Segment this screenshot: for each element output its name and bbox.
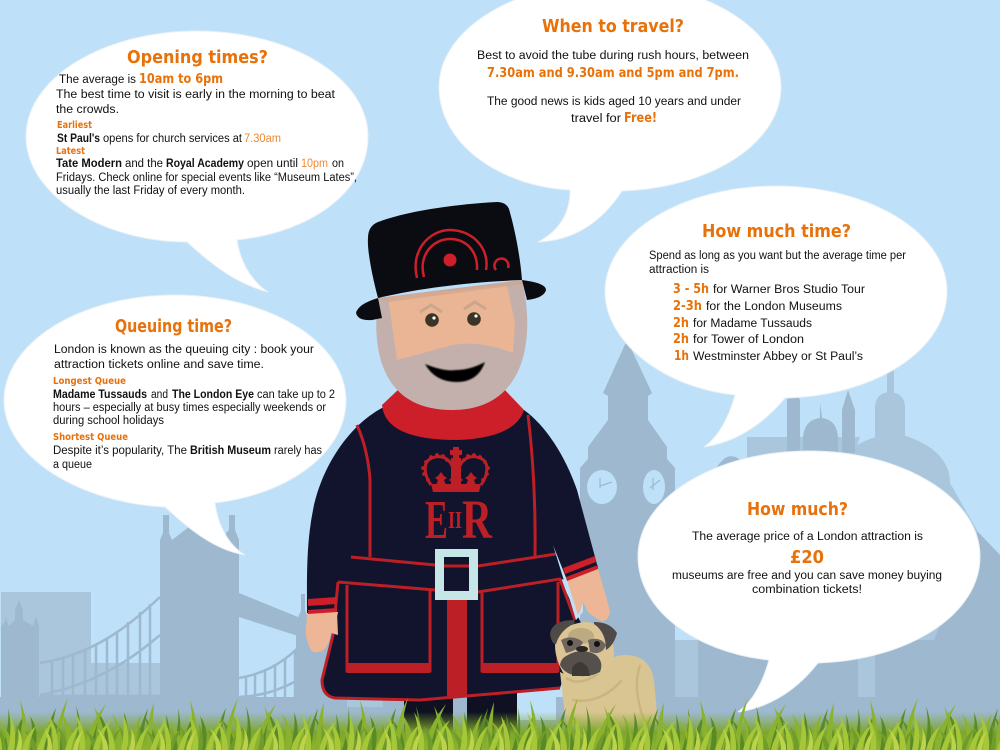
text block: 10am to 6pm: [139, 72, 223, 87]
text block: for Tower of London: [693, 334, 804, 346]
text block: [649, 250, 906, 364]
monogram EIIR: R: [462, 489, 493, 550]
dog ears: [550, 620, 617, 650]
heading: When to travel?: [542, 16, 684, 37]
text block: Tate Modern: [56, 158, 122, 170]
face: [388, 285, 515, 360]
text block: museums are free and you can save money buying: [672, 570, 942, 582]
speech bubble: how much: [638, 451, 980, 712]
text block: opens for church services at: [103, 133, 243, 145]
far buildings: [1, 370, 1000, 702]
text block: 7.30am: [244, 133, 281, 145]
text block: Madame Tussauds: [53, 389, 147, 401]
text block: can take up to 2: [257, 389, 335, 401]
monogram EIIR: E: [425, 489, 448, 550]
text block: Earliest: [57, 120, 92, 131]
text block: and: [151, 389, 168, 401]
text block: attraction is: [649, 264, 709, 276]
crown band: [431, 484, 481, 492]
speech bubble: how much time: [605, 186, 947, 447]
hat: [356, 202, 546, 320]
text block: for the London Museums: [706, 301, 842, 313]
text block: Shortest Queue: [53, 432, 128, 443]
text block: during school holidays: [53, 415, 164, 427]
crown beads: [421, 466, 425, 470]
dog forehead: [568, 628, 594, 644]
speech bubble: opening times: [26, 31, 368, 292]
hat brim: [356, 280, 546, 320]
skyline: London silhouette: [0, 340, 1000, 750]
text block: and the: [125, 158, 163, 170]
dog body: [560, 655, 658, 735]
speech bubble: when to travel: [439, 0, 781, 242]
text block: 2-3h: [673, 299, 702, 314]
bubble shape: [605, 186, 947, 447]
text block: hours – especially at busy times especially weekends or: [53, 402, 326, 414]
right sleeve stripes: [563, 556, 598, 581]
dog eye patches: [561, 637, 606, 653]
bubble shape: [26, 31, 368, 292]
dog muzzle: [560, 651, 601, 676]
text block: Fridays. Check online for special events like “Museum Lates”,: [56, 172, 357, 184]
text block: Spend as long as you want but the average time per: [649, 250, 906, 262]
bubble shape: [439, 0, 781, 242]
speech bubble: queuing time: [4, 295, 346, 555]
heading: Opening times?: [127, 47, 268, 68]
buckle: [435, 549, 478, 600]
text block: 10pm: [301, 158, 328, 170]
text block: Royal Academy: [166, 158, 245, 170]
crown fleurons: [435, 472, 477, 486]
text block: Latest: [56, 146, 85, 157]
pug dog: [550, 620, 658, 735]
ground strip: [0, 697, 1000, 750]
heading: How much?: [747, 499, 848, 520]
text block: Despite it’s popularity, The: [53, 445, 187, 457]
text block: for Warner Bros Studio Tour: [713, 284, 865, 296]
text block: [672, 531, 942, 596]
text block: The average is: [59, 74, 136, 86]
text block: for Madame Tussauds: [693, 318, 812, 330]
coat trim: [322, 415, 575, 700]
right hand: [567, 569, 610, 621]
text block: the crowds.: [56, 104, 119, 116]
text block: British Museum: [190, 445, 271, 457]
text block: [477, 50, 749, 126]
hat crown: [368, 202, 522, 298]
text block: 2h: [673, 316, 689, 331]
text block: The average price of a London attraction is: [692, 531, 923, 543]
left hand: [306, 612, 338, 652]
text block: Free!: [624, 111, 657, 126]
clock faces: [587, 470, 665, 504]
text block: Westminster Abbey or St Paul’s: [693, 351, 863, 363]
text block: [56, 72, 357, 197]
text block: rarely has: [274, 445, 322, 457]
text block: 3 - 5h: [673, 282, 709, 297]
pocket bands: [347, 663, 558, 673]
text block: The best time to visit is early in the morning to beat: [56, 89, 336, 101]
text block: usually the last Friday of every month.: [56, 185, 245, 197]
bubble shape: [638, 451, 980, 712]
dog body shading: [566, 662, 645, 722]
dog nose: [576, 646, 588, 652]
text block: a queue: [53, 459, 92, 471]
tower bridge: [1, 515, 336, 700]
light patches near the ground: [517, 692, 556, 720]
mouth: [425, 362, 485, 382]
sleeve gap: [553, 545, 583, 620]
dog eyes: [567, 640, 600, 647]
text block: Longest Queue: [53, 376, 126, 387]
head: [376, 280, 527, 410]
big ben: [580, 340, 675, 700]
text block: The London Eye: [172, 389, 254, 401]
front panel: [447, 600, 467, 697]
monogram EIIR: [425, 489, 493, 550]
grass: [0, 690, 1000, 750]
crown cross and pillar: [450, 447, 462, 485]
hat shadow on face: [378, 280, 524, 302]
coat: [307, 408, 598, 700]
crown emblem: [421, 447, 490, 492]
text block: London is known as the queuing city : book your: [54, 344, 314, 356]
text block: The good news is kids aged 10 years and under: [487, 96, 741, 108]
text block: attraction tickets online and save time.: [54, 359, 264, 371]
text block: 1h: [674, 349, 689, 364]
monogram EIIR: II: [448, 508, 462, 534]
text block: 7.30am and 9.30am and 5pm and 7pm.: [487, 66, 739, 81]
character: beefeater guard: [306, 202, 610, 750]
left sleeve stripes: [308, 597, 337, 614]
text block: £20: [790, 547, 824, 568]
legs: [404, 690, 517, 750]
text block: travel for: [571, 113, 621, 125]
heading: How much time?: [702, 221, 851, 242]
st pauls towers: [698, 388, 1000, 700]
bubble shape: [4, 295, 346, 555]
text block: combination tickets!: [752, 584, 862, 596]
crown arches: [425, 457, 487, 485]
text block: open until: [247, 158, 298, 170]
text block: [53, 344, 335, 471]
eyebrows: [420, 302, 486, 312]
text block: Best to avoid the tube during rush hours, between: [477, 50, 749, 62]
text block: on: [332, 158, 344, 170]
heading: Queuing time?: [115, 316, 232, 337]
eyes: [425, 312, 481, 327]
text block: St Paul's: [57, 133, 100, 145]
text block: 2h: [673, 332, 689, 347]
dog chin: [572, 662, 590, 676]
collar: [382, 388, 524, 440]
hat insignia: [416, 230, 508, 278]
dog head: [555, 622, 614, 676]
